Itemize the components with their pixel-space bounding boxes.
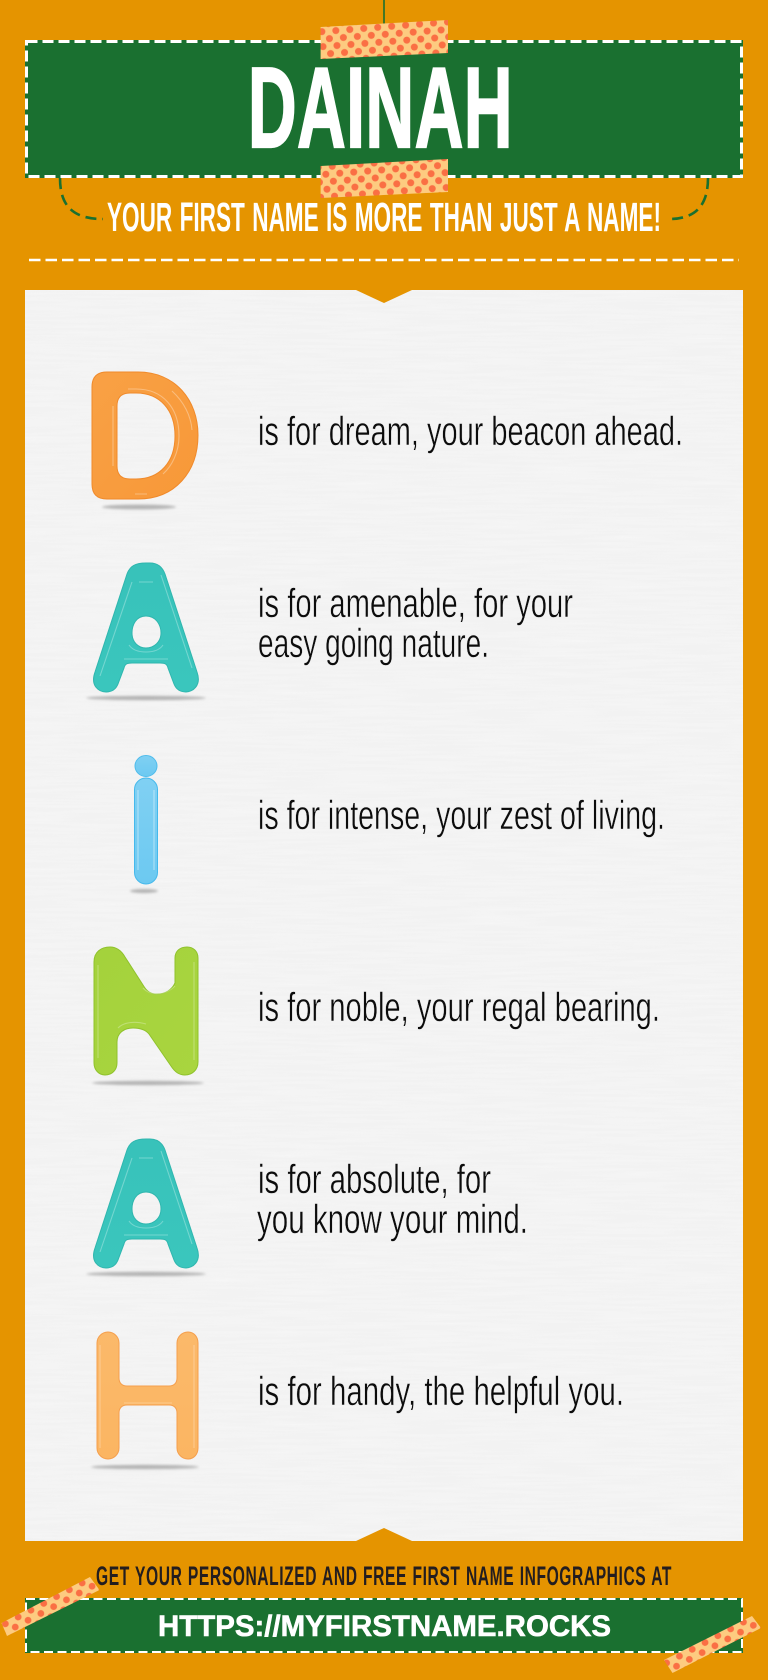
second letter A row [86,1139,528,1276]
title: DAINAH [248,45,513,172]
letter A row [86,563,573,700]
hanging string [383,0,385,24]
icon: letter D [92,372,198,509]
tape: footer left [2,1577,100,1636]
text: second A meaning [257,1156,528,1242]
text: second A meaning: is for absolute, for [258,1156,491,1202]
title banner [25,40,743,178]
tape: banner top [321,20,448,59]
icon: letter i [130,756,158,893]
tape: footer right [664,1616,761,1673]
text: A meaning: easy going nature. [258,620,489,666]
dashed divider [29,259,739,261]
text: A meaning [258,580,573,666]
letter I row [130,756,665,893]
curved connector: right [669,178,708,219]
text: H meaning: is for handy, the helpful you. [258,1368,624,1414]
letter D row [92,372,683,509]
letter H row [91,1332,624,1469]
curved connector: left [60,178,103,219]
panel: letter meanings [25,290,743,1541]
text: second A meaning: you know your mind. [257,1196,528,1242]
text: A meaning: is for amenable, for your [258,580,573,626]
tape: banner bottom [321,159,448,198]
letter N row [92,947,660,1085]
icon: letter H [91,1332,199,1469]
icon: letter A [86,563,206,700]
footer url: HTTPS://MYFIRSTNAME.ROCKS [158,1610,611,1643]
icon: letter N [92,947,204,1085]
icon: second letter A [86,1139,206,1276]
footer banner [25,1598,743,1653]
